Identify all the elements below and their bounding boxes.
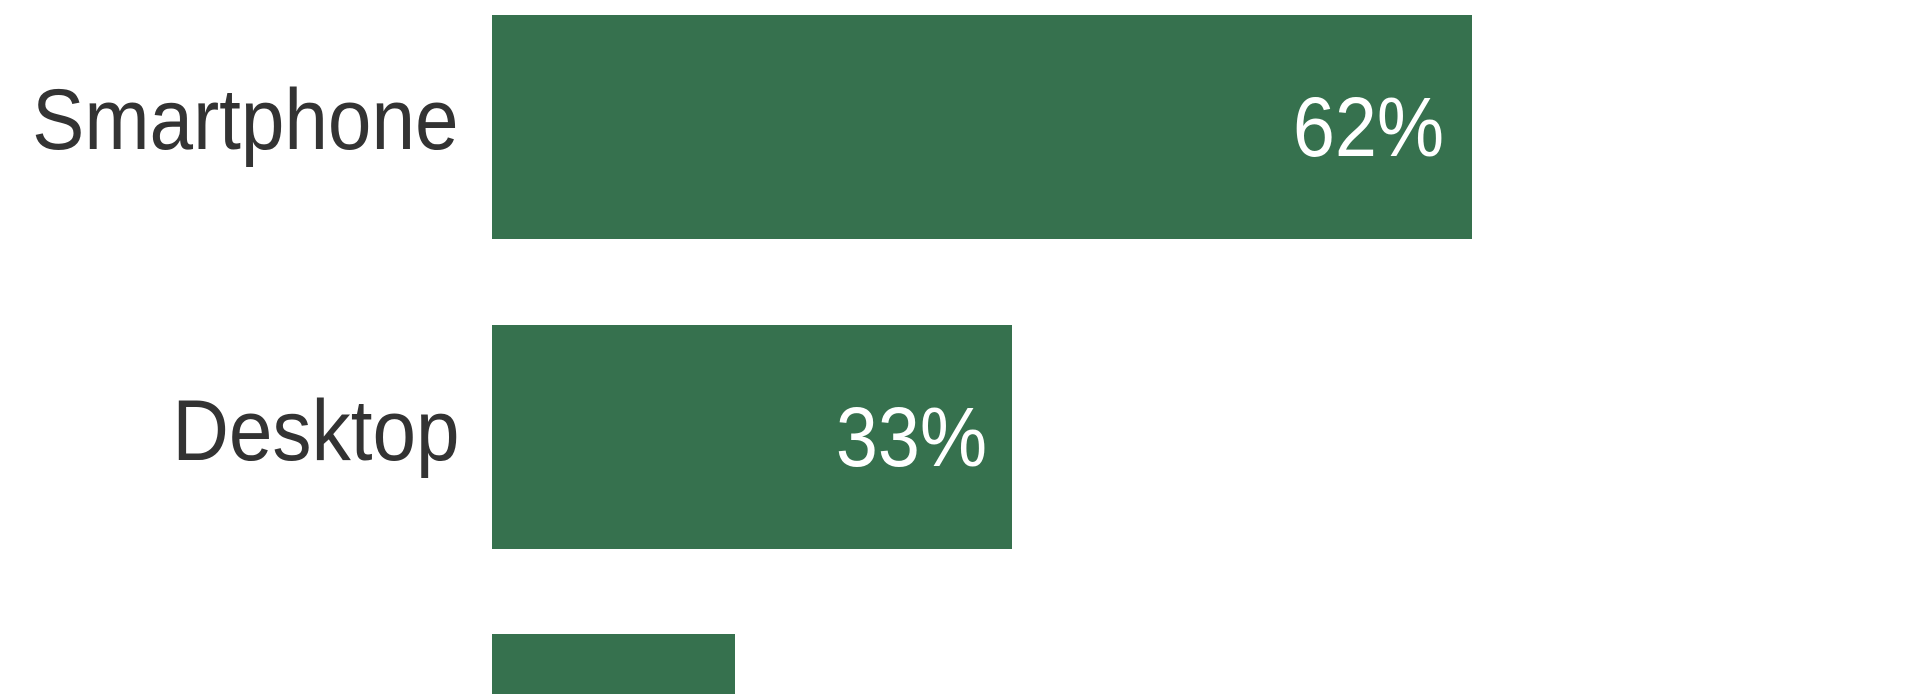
bar: Desktop 33%	[492, 325, 1012, 549]
bar: Smartphone 62%	[492, 15, 1472, 239]
label: Desktop: Desktop	[172, 383, 459, 479]
bar: third category	[492, 634, 735, 694]
bar: Desktop 33%: 33%	[836, 390, 987, 484]
label: Smartphone: Smartphone	[33, 72, 459, 168]
bar: Smartphone 62%: 62%	[1293, 80, 1444, 174]
